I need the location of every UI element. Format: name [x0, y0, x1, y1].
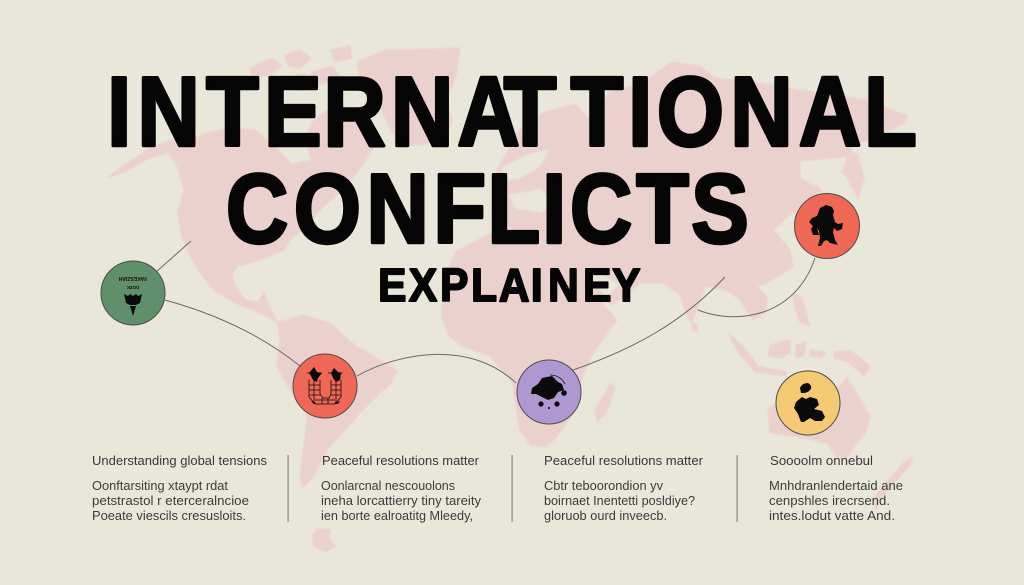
- canadian arctic islands: [250, 46, 352, 90]
- japan and new zealand: [848, 150, 913, 510]
- title: CONFLICTS: [226, 153, 749, 264]
- column 4 text: cenpshles irecrsend.: [769, 493, 890, 508]
- column 1 text: [92, 453, 267, 523]
- column 4 text: Mnhdranlendertaid ane: [769, 478, 903, 493]
- connector lines: [156, 241, 815, 383]
- column 1 text: Poeate viescils cresusloits.: [92, 508, 246, 523]
- borneo: [768, 340, 790, 358]
- title: [107, 56, 917, 311]
- column 2 text: Peaceful resolutions matter: [322, 453, 480, 468]
- column 1 text: Oonftarsiting xtaypt rdat: [92, 478, 228, 493]
- column 4 text: [769, 453, 903, 523]
- tierra del fuego: [312, 528, 336, 552]
- column 1 text: Understanding global tensions: [92, 453, 267, 468]
- south america: [277, 315, 397, 487]
- icon: yellow circle with silhouette: [776, 371, 840, 435]
- eurasia: [495, 62, 907, 322]
- column 2 text: ineha lorcattierry tiny tareity: [321, 493, 482, 508]
- column 2 text: ien borte ealroatitg Mleedy,: [321, 508, 473, 523]
- icon: green circle with bow tie: ŊOZK: [126, 285, 139, 290]
- africa: [442, 234, 617, 447]
- north america: [108, 108, 372, 322]
- title: INTERNATTIONAL: [107, 56, 917, 167]
- icon: green circle with bow tie: [101, 261, 165, 325]
- sumatra and java: [728, 333, 786, 376]
- new guinea: [834, 350, 870, 376]
- sulawesi and moluccas: [796, 342, 826, 358]
- icon: purple circle with splatter: [517, 360, 581, 424]
- column 3 text: [544, 453, 704, 523]
- divider 1: [288, 455, 289, 522]
- icon: green circle with bow tie: VAKESZIAH: [118, 275, 147, 281]
- column 2 text: [321, 453, 482, 523]
- column 2 text: Oonlarcnal nescouolons: [321, 478, 455, 493]
- title: EXPLAINEY: [378, 260, 640, 311]
- divider 3: [737, 455, 738, 522]
- australia: [768, 378, 870, 458]
- divider 2: [511, 455, 514, 522]
- icon: red circle with towers: [293, 354, 357, 418]
- column 3 text: Peaceful resolutions matter: [544, 453, 704, 468]
- column 4 text: intes.lodut vatte And.: [769, 508, 895, 523]
- column 3 text: boirnaet Inentetti posldiye?: [544, 493, 695, 508]
- world map background: [108, 46, 913, 552]
- icon: red circle with figure: [794, 194, 860, 258]
- pale seas: [502, 150, 846, 296]
- greenland: [357, 48, 460, 146]
- column 4 text: Soooolm onnebul: [770, 453, 873, 468]
- column 3 text: gloruob ourd inveecb.: [544, 508, 667, 523]
- column 3 text: Cbtr teboorondion yv: [544, 478, 663, 493]
- column 1 text: petstrastol r eterceralncioe: [92, 493, 249, 508]
- philippines and islands: [692, 293, 810, 332]
- madagascar: [595, 383, 615, 421]
